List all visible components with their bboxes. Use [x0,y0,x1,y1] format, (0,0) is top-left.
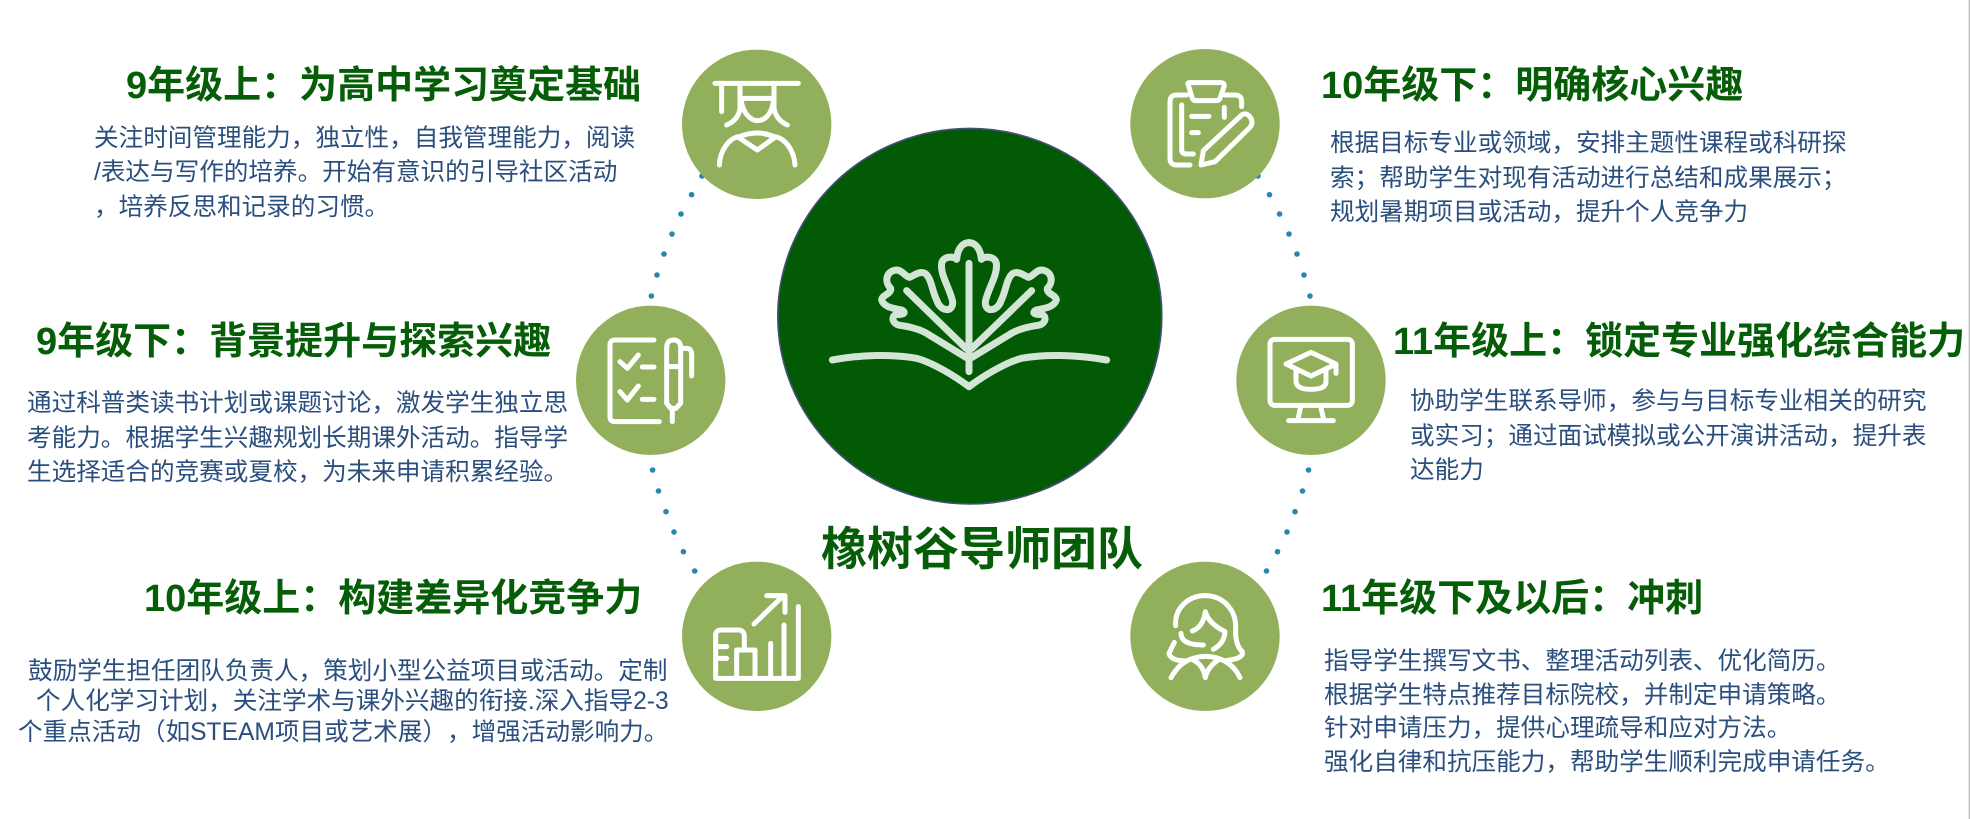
text: 10th grade second term: 根据目标专业或领域，安排主题性课程或科研探 [1330,130,1846,157]
icon badge: 10th grade first term, growth chart [682,562,831,711]
heading: 11th grade second term: 11年级下及以后：冲刺 [1321,578,1703,620]
icon badge: 9th grade second term, checklist [576,306,725,455]
text: 9th grade first term [94,125,635,221]
text: 9th grade second term: 考能力。根据学生兴趣规划长期课外活动。指导学 [27,425,568,452]
icon badge: 11th grade second term, woman [1130,562,1280,711]
text: 10th grade first term: 个人化学习计划，关注学术与课外兴趣的衔接.深入指导2-3 [36,688,669,715]
text: 11th grade second term: 指导学生撰写文书、整理活动列表、优化简历。 [1324,648,1840,675]
center title: 橡树谷导师团队 [821,523,1143,575]
dotted connector: lower right [1264,467,1311,574]
text: 11th grade second term: 根据学生特点推荐目标院校，并制定申请策略。 [1324,682,1840,709]
text: 9th grade first term: 关注时间管理能力，独立性，自我管理能力，阅读 [94,125,635,152]
text: 9th grade second term: 生选择适合的竞赛或夏校，为未来申请积累经验。 [27,459,568,486]
heading: 11th grade first term: 11年级上：锁定专业强化综合能力 [1393,321,1965,363]
text: 9th grade first term: /表达与写作的培养。开始有意识的引导社区活动 [94,159,617,186]
text: 10th grade first term [18,658,669,746]
text: 10th grade second term: 索；帮助学生对现有活动进行总结和成果展示； [1330,165,1846,192]
heading: 10th grade first term: 10年级上：构建差异化竞争力 [144,578,642,620]
text: 9th grade first term: ，培养反思和记录的习惯。 [94,194,389,221]
heading: 9th grade second term: 9年级下：背景提升与探索兴趣 [36,321,551,363]
text: 11th grade first term: 协助学生联系导师，参与与目标专业相关的研究 [1410,388,1926,415]
icon badge: 9th grade first term, student [682,50,831,199]
heading: 10th grade second term: 10年级下：明确核心兴趣 [1321,65,1743,107]
text: 11th grade first term: 或实习；通过面试模拟或公开演讲活动，提升表 [1410,423,1926,450]
dotted connector: upper left [649,173,705,299]
icon badge: 11th grade first term, monitor with cap [1236,306,1386,455]
central circle [778,128,1162,504]
text: 11th grade first term: 达能力 [1410,457,1484,484]
text: 9th grade second term [27,390,568,486]
text: 10th grade first term: 鼓励学生担任团队负责人，策划小型公益项目或活动。定制 [28,658,667,685]
dotted connector: lower left [650,467,698,574]
logo: oak leaf on open book [832,243,1107,387]
text: 11th grade second term: 针对申请压力，提供心理疏导和应对方法。 [1324,715,1791,742]
text: 11th grade second term [1324,648,1890,776]
icon badge: 10th grade second term, clipboard [1130,49,1280,198]
dotted connector: upper right [1255,173,1313,299]
text: 10th grade second term: 规划暑期项目或活动，提升个人竞争力 [1330,199,1748,226]
text: 9th grade second term: 通过科普类读书计划或课题讨论，激发学生独立思 [27,390,568,417]
text: 10th grade first term: 个重点活动（如STEAM项目或艺术展），增强活动影响力。 [18,719,668,746]
text: 10th grade second term [1330,130,1846,226]
heading: 9th grade first term: 9年级上：为高中学习奠定基础 [126,65,641,107]
text: 11th grade first term [1410,388,1926,484]
text: 11th grade second term: 强化自律和抗压能力，帮助学生顺利完成申请任务。 [1324,749,1890,776]
